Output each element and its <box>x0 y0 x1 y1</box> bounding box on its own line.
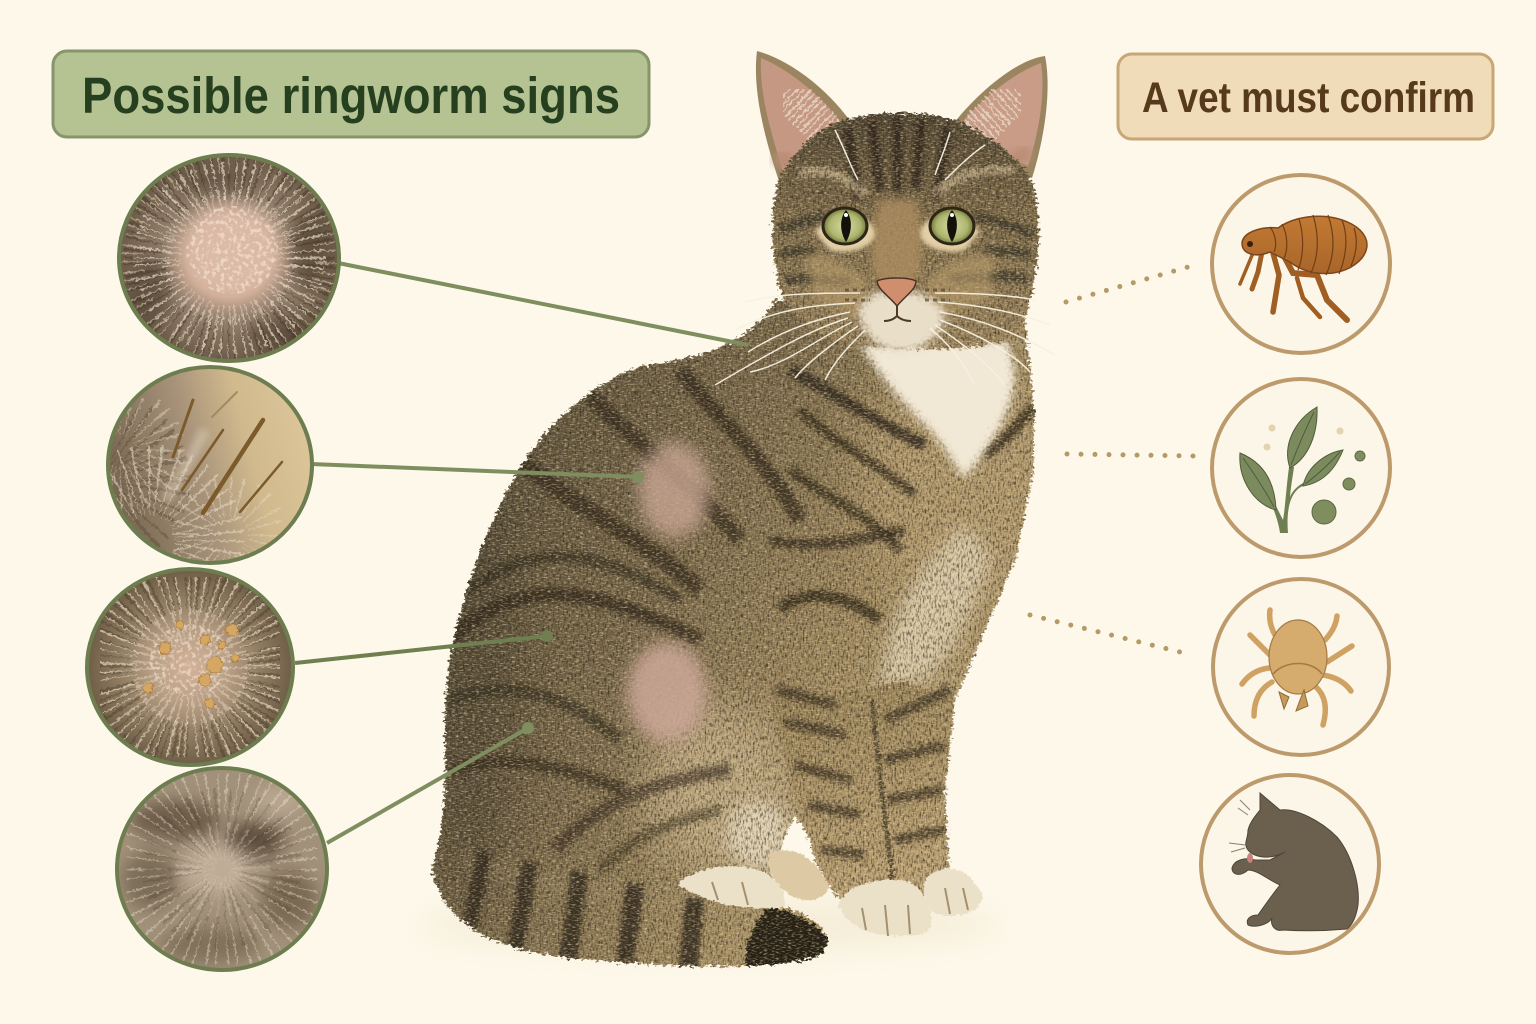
front paw left <box>838 880 931 936</box>
icon: mite <box>1213 579 1389 755</box>
plant stem <box>1270 467 1305 533</box>
flea legs <box>1240 252 1347 320</box>
connector: thigh lesion <box>327 722 534 843</box>
heading: a vet must confirm: A vet must confirm <box>1142 74 1475 122</box>
paw toe lines <box>712 882 968 936</box>
nose and mouth <box>877 278 916 321</box>
front paw right <box>924 869 982 916</box>
connector: shoulder lesion <box>311 464 644 483</box>
grooming cat silhouette <box>1232 793 1358 931</box>
white muzzle and chin <box>858 291 945 352</box>
mite body <box>1269 620 1327 694</box>
white chest bib <box>860 340 1014 478</box>
mite legs <box>1242 610 1352 725</box>
shading <box>420 460 520 900</box>
bald patch on haunch <box>627 642 707 742</box>
circle: patchy fur loss <box>117 768 327 970</box>
dotted connector: mites <box>1030 615 1192 655</box>
leaves <box>1240 407 1343 510</box>
cat head <box>772 113 1039 352</box>
circle: broken hairs <box>106 365 314 565</box>
flea body <box>1242 216 1367 274</box>
heading: possible ringworm signs <box>53 51 649 137</box>
icon: plant and pollen <box>1212 379 1390 557</box>
tan cheeks <box>805 255 995 318</box>
dotted connector: allergens <box>1067 454 1195 456</box>
left ear <box>756 51 855 184</box>
icon: flea <box>1212 175 1390 353</box>
hind paw <box>769 850 828 900</box>
nose bridge <box>871 200 922 282</box>
icon: cat grooming <box>1201 775 1379 953</box>
bald patch on shoulder <box>638 442 710 538</box>
cat body with tabby fur <box>420 300 1040 968</box>
haunch paw <box>678 866 785 908</box>
front legs and paws <box>770 680 955 905</box>
pollen dots <box>1264 424 1365 524</box>
right eye <box>920 208 980 252</box>
cat illustration <box>420 51 1055 968</box>
circle: crusts and scabs <box>87 569 293 765</box>
whiskers <box>715 130 1055 385</box>
whisker spots <box>845 290 950 300</box>
connector: neck lesion <box>338 263 748 345</box>
heading: possible ringworm signs: Possible ringworm signs <box>82 67 620 124</box>
left eye <box>815 208 875 252</box>
tongue <box>1247 853 1253 863</box>
right ear <box>950 56 1048 178</box>
dotted connector: fleas <box>1066 265 1195 302</box>
circle: scaly bald patch <box>119 155 339 361</box>
heading: a vet must confirm <box>1118 54 1493 139</box>
cat whiskers <box>1229 800 1250 852</box>
connector: flank lesion <box>295 630 553 663</box>
floor shadow <box>420 897 1000 953</box>
leaf veins <box>1243 412 1340 507</box>
